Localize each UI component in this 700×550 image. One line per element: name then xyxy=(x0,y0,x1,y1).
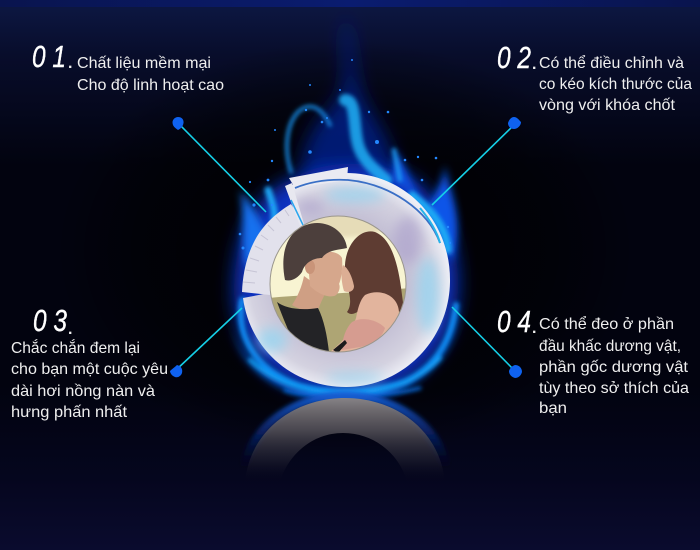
man face xyxy=(308,252,342,296)
text 02: vòng với khóa chốt xyxy=(539,97,676,114)
feature 02 xyxy=(497,40,692,114)
photo backdrop xyxy=(270,216,406,298)
flame highlights xyxy=(241,100,456,396)
text 02 xyxy=(539,54,692,114)
feature 03 xyxy=(11,303,168,421)
text 01: Cho độ linh hoạt cao xyxy=(77,77,224,94)
number 02: . xyxy=(532,56,536,73)
flame sparks xyxy=(239,59,451,250)
text 04 xyxy=(539,315,689,417)
woman face xyxy=(341,265,354,292)
text 01 xyxy=(77,55,224,94)
main flame bodies xyxy=(232,150,458,400)
blue flame xyxy=(232,15,458,400)
stepped clasp band xyxy=(242,204,304,295)
text 02: Có thể điều chỉnh và xyxy=(539,54,684,72)
clasp teeth xyxy=(243,210,289,283)
text 03 xyxy=(11,338,168,421)
text 02: co kéo kích thước của xyxy=(539,76,692,93)
number 03: 0 3 xyxy=(33,303,67,338)
number 01: 0 1 xyxy=(32,39,66,74)
text 01: Chất liệu mềm mại xyxy=(77,55,211,72)
text 03: hưng phấn nhất xyxy=(11,404,128,421)
text 03: Chắc chắn đem lại xyxy=(11,338,140,357)
ring body xyxy=(243,173,450,387)
connector line 04 xyxy=(452,307,522,378)
outer flame glow xyxy=(234,15,458,396)
woman shoulder and arm xyxy=(330,292,399,352)
hand xyxy=(342,319,385,350)
text 04: tùy theo sở thích của xyxy=(539,380,689,397)
feature 04 xyxy=(497,304,689,417)
woman hair xyxy=(344,231,404,314)
bracelet xyxy=(333,340,347,352)
top buckle plate xyxy=(289,167,348,188)
ring purple shading xyxy=(296,200,422,264)
text 04: bạn xyxy=(539,400,567,417)
photo rim xyxy=(270,216,406,352)
icon: dot 02 xyxy=(508,117,521,129)
connector line 03 xyxy=(170,308,242,377)
number 04: . xyxy=(532,320,536,337)
connector line 02 xyxy=(432,117,521,205)
number 04: 0 4 xyxy=(497,304,531,339)
connector line 01 xyxy=(172,117,266,212)
number 02: 0 2 xyxy=(497,40,531,75)
icon: dot 01 xyxy=(172,117,184,130)
couple photo xyxy=(270,216,406,352)
man shirt xyxy=(277,302,329,356)
feature 01 xyxy=(32,39,224,94)
man neck xyxy=(292,276,326,311)
text 04: Có thể đeo ở phần xyxy=(539,315,674,333)
number 03: . xyxy=(68,321,72,338)
icon: dot 03 xyxy=(170,365,182,377)
man ear xyxy=(305,260,315,274)
text 04: đầu khấc dương vật, xyxy=(539,338,681,355)
icon: dot 04 xyxy=(509,365,522,378)
ring translucent blue tints xyxy=(257,188,439,383)
reflection of the ring xyxy=(238,391,452,482)
number 01: . xyxy=(68,55,72,72)
man hair xyxy=(283,223,347,281)
text 04: phần gốc dương vật xyxy=(539,359,689,376)
ring product xyxy=(242,167,450,387)
ring blue groove xyxy=(295,180,440,243)
text 03: cho bạn một cuộc yêu xyxy=(11,361,168,378)
text 03: dài hơi nồng nàn và xyxy=(11,383,155,400)
